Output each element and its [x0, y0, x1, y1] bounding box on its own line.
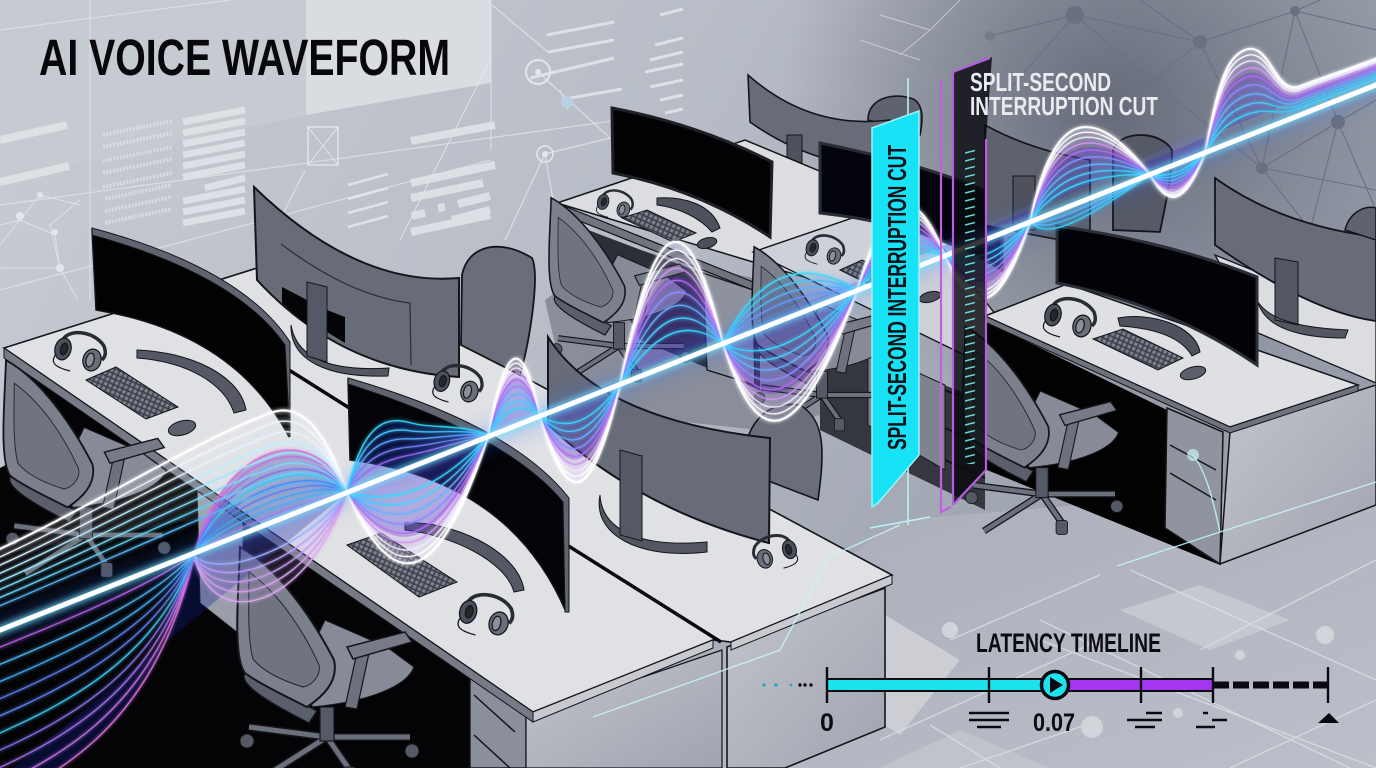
legend icon: lines — [969, 713, 1009, 727]
far right chair back — [1345, 207, 1376, 240]
back chair — [1113, 135, 1172, 232]
desk seam — [289, 370, 721, 642]
second monitor — [820, 143, 1002, 270]
label 0.07: 0.07 — [1033, 709, 1075, 737]
latency timeline — [762, 628, 1339, 737]
circuit trace lines — [593, 455, 1376, 717]
purple segment — [1068, 679, 1213, 691]
tick scale — [965, 148, 975, 464]
drawer cabinet — [1165, 408, 1223, 564]
callout: split-second interruption cut: SPLIT-SECOND — [970, 67, 1111, 97]
dark glass panel — [953, 57, 992, 505]
title: AI VOICE WAVEFORM — [39, 29, 450, 86]
mouse — [1179, 364, 1207, 382]
second mouse — [918, 289, 942, 305]
lead-in dots — [762, 683, 813, 687]
background data panels — [0, 0, 960, 300]
centre keyboard — [347, 533, 457, 597]
desktop surface — [557, 140, 985, 330]
right monitor chair — [740, 404, 822, 500]
front chair — [237, 547, 419, 768]
desktop surface — [4, 268, 892, 712]
keyboard — [1093, 329, 1183, 370]
rear monitor — [254, 187, 459, 377]
centre monitor — [348, 378, 569, 612]
playhead — [1042, 672, 1068, 698]
monitor screen — [1057, 226, 1257, 365]
right monitor — [548, 337, 770, 543]
second chair — [752, 247, 894, 431]
dark desk base — [820, 340, 985, 510]
interruption cut panel — [870, 57, 992, 528]
under desk shadow — [545, 245, 880, 430]
tick marks — [827, 667, 1328, 703]
desktop surface — [985, 284, 1358, 427]
rear monitor — [985, 125, 1090, 245]
background network, upper right — [985, 0, 1376, 230]
callout: split-second interruption cut: INTERRUPTION CUT — [970, 91, 1158, 121]
monitor stand — [1118, 317, 1200, 356]
desktop front edge — [985, 316, 1358, 433]
end marker triangle — [1318, 713, 1339, 723]
left chair — [3, 360, 171, 577]
far right stand — [1258, 258, 1348, 338]
second surface — [753, 200, 1000, 365]
thin cyan guide line — [870, 78, 930, 528]
monitor, screen — [612, 108, 772, 237]
rear monitor stand — [291, 282, 389, 376]
drawer cabinet — [703, 273, 755, 385]
cabinet face — [868, 350, 945, 470]
mouse — [696, 236, 718, 250]
timeline heading: LATENCY TIMELINE — [976, 628, 1161, 658]
rear chair — [461, 247, 535, 375]
cyan segment — [827, 679, 1042, 691]
right monitor stand — [599, 495, 707, 553]
headset — [1042, 299, 1095, 339]
keyboard — [622, 210, 696, 242]
right monitor post — [620, 450, 642, 541]
cyan label bar — [872, 111, 919, 507]
second keyboard — [840, 260, 905, 290]
cabinet side panel — [1220, 385, 1376, 564]
rear headset — [432, 366, 482, 404]
headset — [596, 190, 633, 219]
back row monitor — [748, 75, 890, 170]
dashed segment — [1213, 682, 1328, 688]
black under desk — [0, 370, 470, 768]
purple panel edges — [953, 58, 990, 505]
second headset — [804, 235, 844, 266]
left keyboard — [86, 367, 178, 419]
left monitor stand — [137, 350, 246, 413]
front panel — [526, 650, 722, 768]
central beam — [0, 81, 1376, 634]
front desk station — [0, 187, 1376, 768]
legend icon: offset lines — [1127, 713, 1162, 727]
legend icon: short lines — [1196, 713, 1227, 727]
label zero: 0 — [820, 709, 834, 737]
thin outer purple line — [941, 79, 951, 512]
left mouse — [167, 418, 197, 438]
right monitor headset — [753, 536, 798, 570]
centre headset — [457, 595, 513, 637]
middle desk station — [545, 108, 1002, 510]
far right monitor — [1215, 178, 1376, 321]
callout: split-second interruption cut — [970, 67, 1158, 121]
back row stand — [777, 135, 830, 190]
desk front edge — [557, 203, 753, 290]
under desk black — [987, 322, 1220, 565]
left monitor — [92, 228, 290, 437]
far right desk surface — [1215, 255, 1376, 383]
back row workstation — [748, 75, 922, 190]
chair — [963, 327, 1123, 534]
chair — [549, 198, 691, 382]
left headset — [52, 333, 105, 373]
monitor stand — [657, 198, 720, 232]
right desk station — [963, 125, 1376, 565]
right cabinet — [727, 588, 885, 768]
back row chair — [868, 96, 922, 135]
centre monitor stand — [405, 523, 524, 592]
desk edge thickness — [4, 348, 533, 722]
rear monitor stand — [1013, 176, 1035, 230]
drawer cabinet — [470, 673, 526, 768]
cyan bar label: SPLIT-SECOND INTERRUPTION CUT — [882, 145, 912, 450]
modesty panel — [197, 487, 243, 637]
